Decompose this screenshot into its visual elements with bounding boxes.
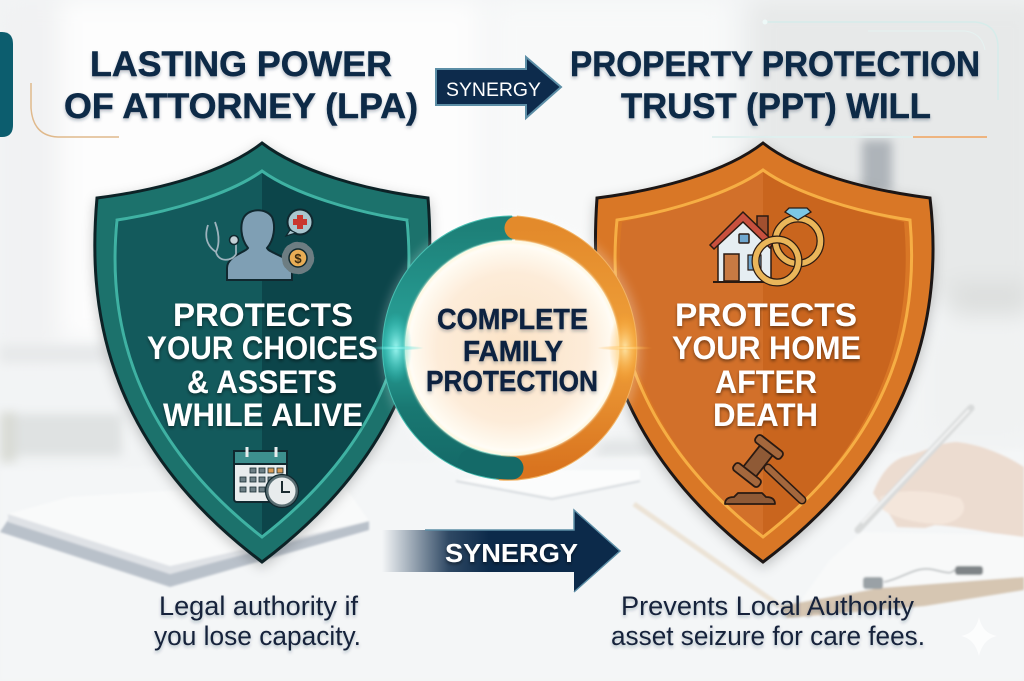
- text: PPT shield statement: YOUR HOME: [672, 330, 861, 366]
- caption: LPA: Legal authority if: [159, 591, 358, 621]
- caption: PPT will: Prevents Local Authority: [621, 591, 914, 621]
- arrow: top synergy: [436, 57, 561, 118]
- text: center statement: FAMILY: [463, 336, 563, 368]
- text: LPA shield statement: PROTECTS: [173, 297, 353, 333]
- heading: PPT will: PROPERTY PROTECTION: [570, 45, 980, 84]
- text: PPT shield statement: PROTECTS: [675, 297, 857, 333]
- text: center statement: PROTECTION: [426, 366, 598, 398]
- icon: person with stethoscope, medical and money badges: $: [294, 251, 302, 266]
- heading: PPT will: [570, 45, 980, 126]
- text: PPT shield statement: AFTER: [715, 364, 817, 400]
- icon: person with stethoscope, medical and money badges: [206, 210, 312, 280]
- text: center statement: [426, 304, 598, 398]
- text: LPA shield statement: YOUR CHOICES: [147, 330, 378, 366]
- heading: LPA: LASTING POWER: [90, 45, 392, 84]
- background: pencil on desk: [634, 504, 780, 606]
- arrow: lower synergy: [382, 510, 620, 592]
- text: PPT shield statement: [672, 297, 861, 433]
- icon: sparkle watermark: [961, 617, 997, 656]
- text: PPT shield statement: DEATH: [713, 397, 818, 433]
- heading: LPA: OF ATTORNEY (LPA): [64, 87, 418, 126]
- icon: house and wedding rings: [710, 208, 820, 282]
- background: tablet behind ring: [456, 470, 640, 499]
- text: LPA shield statement: WHILE ALIVE: [163, 397, 363, 433]
- caption: PPT will: asset seizure for care fees.: [611, 621, 925, 651]
- text: center statement: COMPLETE: [437, 304, 588, 336]
- text: LPA shield statement: & ASSETS: [187, 364, 337, 400]
- icon: gavel: [725, 434, 802, 504]
- sidebar tab: [0, 32, 13, 137]
- caption: LPA: [154, 591, 361, 651]
- panel: LPA shield: [95, 143, 430, 562]
- heading: LPA: [64, 45, 418, 126]
- panel: PPT will shield: [595, 143, 933, 562]
- heading: PPT will: TRUST (PPT) WILL: [621, 87, 931, 126]
- background: notebook stack: [0, 480, 369, 587]
- caption: LPA: you lose capacity.: [154, 621, 361, 651]
- background: hand writing on clipboard: [780, 408, 1024, 618]
- text: LPA shield statement: [147, 297, 378, 433]
- icon: calendar and clock: [234, 447, 298, 508]
- caption: PPT will: [611, 591, 925, 651]
- decorative gold corner: [31, 83, 119, 137]
- arrow: top synergy: SYNERGY: [446, 80, 541, 101]
- arrow: lower synergy: SYNERGY: [445, 538, 578, 568]
- center ring: complete family protection: [368, 214, 653, 482]
- decorative tech lines: [712, 20, 998, 137]
